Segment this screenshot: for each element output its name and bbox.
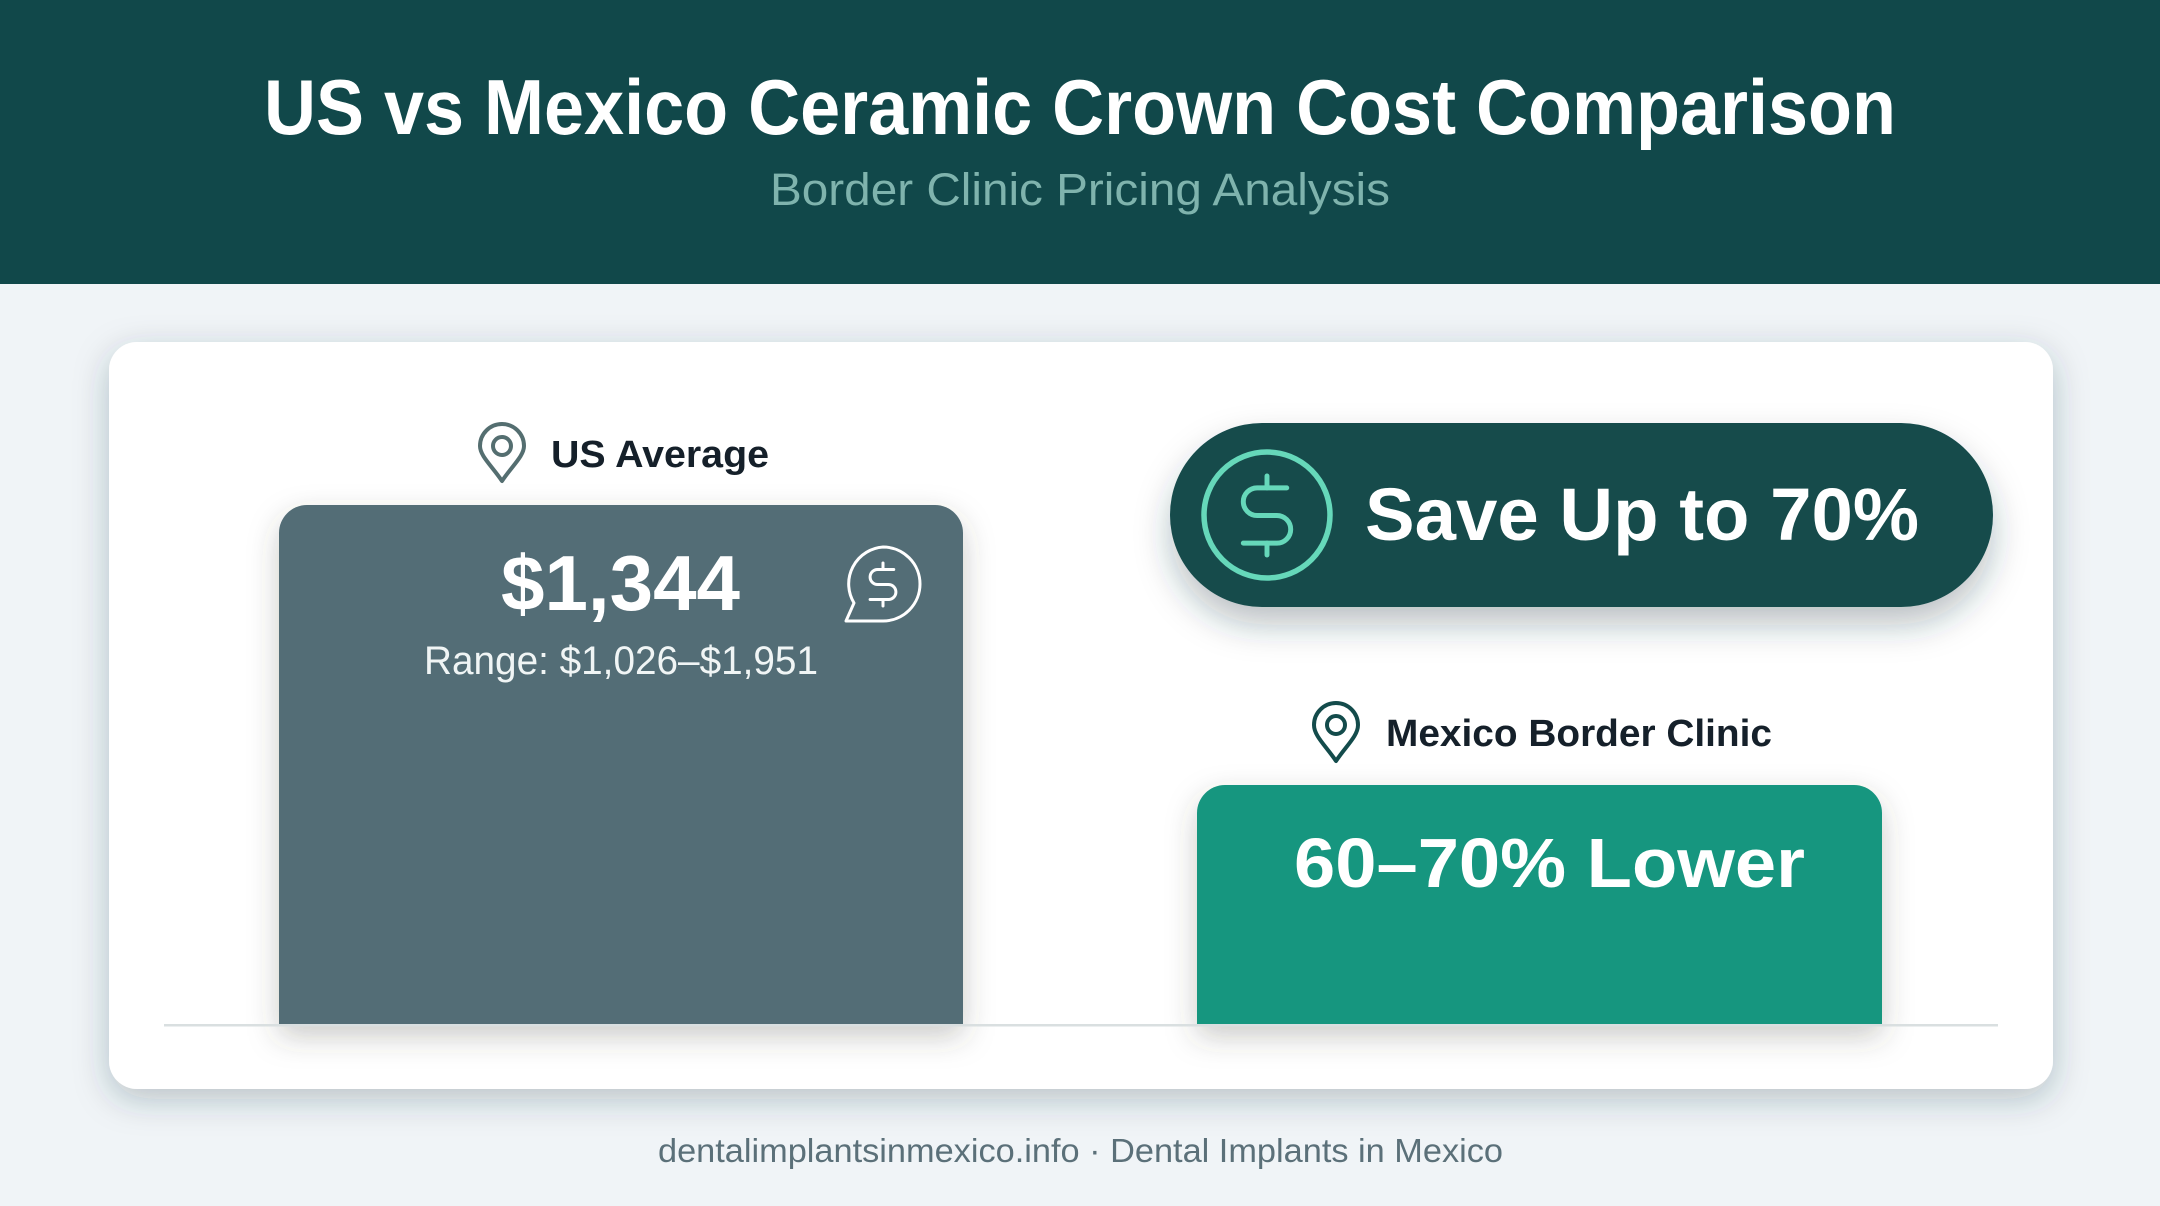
panel: comparison card [109,342,2053,1089]
icon: speech bubble dollar [846,547,920,621]
baseline axis [164,1024,1998,1026]
subtitle: Border Clinic Pricing Analysis [770,164,1390,215]
callout: save up to 70% [1170,423,1993,607]
bar: US Average [279,505,963,1024]
footer source: dentalimplantsinmexico.info · Dental Implants in Mexico [658,1132,1503,1169]
US range: Range: $1,026–$1,951 [424,639,818,683]
header band [0,0,2160,284]
callout: save up to 70%: Save Up to 70% [1365,473,1919,556]
icon: location pin Mexico [1314,703,1358,761]
bar: Mexico Border Clinic [1197,785,1882,1024]
icon: location pin US [480,424,524,481]
title: US vs Mexico Ceramic Crown Cost Comparison [264,63,1896,151]
Mexico savings: 60–70% Lower [1294,824,1805,902]
label: Mexico Border Clinic: Mexico Border Clinic [1386,713,1772,755]
label: US Average [480,424,769,481]
label: US Average: US Average [551,434,769,476]
icon: dollar circle [1204,452,1330,578]
label: Mexico Border Clinic [1314,703,1772,761]
US price: $1,344 [501,539,740,627]
